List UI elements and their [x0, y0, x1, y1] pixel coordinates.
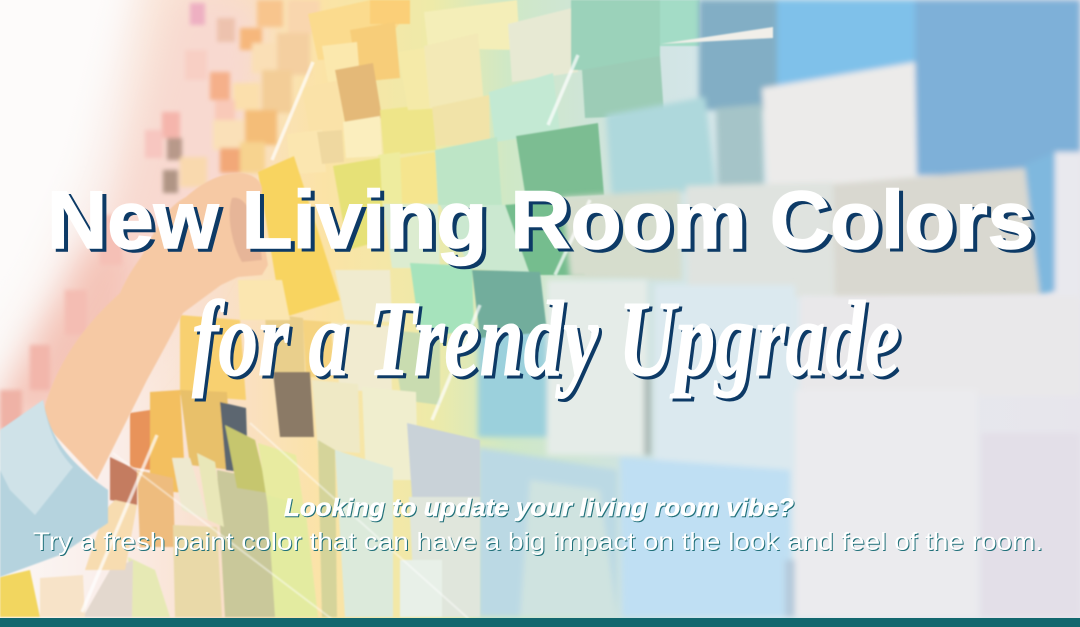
middle swatches by the arm: [0, 263, 547, 617]
white fade at far left: [0, 0, 140, 370]
upper right blurred swatches: [562, 0, 1080, 302]
pink blurred far swatches: [0, 0, 260, 440]
white rack edges and clear plastic lines: [82, 55, 590, 620]
tagline question: Looking to update your living room vibe?: [284, 494, 794, 522]
middle and lower right blurred swatches: [478, 280, 1080, 617]
upper yellow and green swatches: [258, 0, 700, 318]
title: New Living Room Colors: New Living Room Colors: [47, 175, 1034, 266]
bottom teal bar: [0, 618, 1080, 627]
arm and hand: [41, 173, 268, 480]
shirt sleeve: [0, 400, 108, 577]
tagline description: Try a fresh paint color that can have a big impact on the look and feel of the room.: [33, 528, 1043, 556]
small mosaic swatches: [0, 0, 320, 430]
